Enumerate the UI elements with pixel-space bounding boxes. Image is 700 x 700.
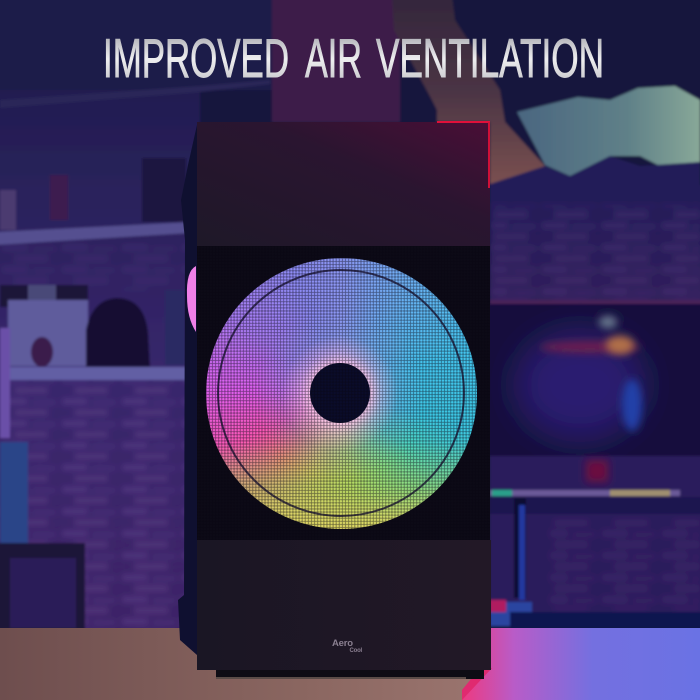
logo: AeroCool (332, 638, 362, 654)
logo: AeroCool: Aero (332, 638, 353, 649)
logo: AeroCool: Cool (349, 648, 362, 654)
table (0, 628, 500, 700)
shelves (0, 222, 190, 245)
case side edge (178, 125, 197, 655)
pc case (178, 121, 491, 679)
fan ring and hub (217, 269, 465, 517)
title: AIR (305, 27, 362, 89)
title: IMPROVED (103, 27, 289, 89)
fan glow (206, 258, 477, 529)
case front (197, 121, 491, 679)
title (103, 27, 604, 89)
mesh overlay (197, 246, 490, 540)
